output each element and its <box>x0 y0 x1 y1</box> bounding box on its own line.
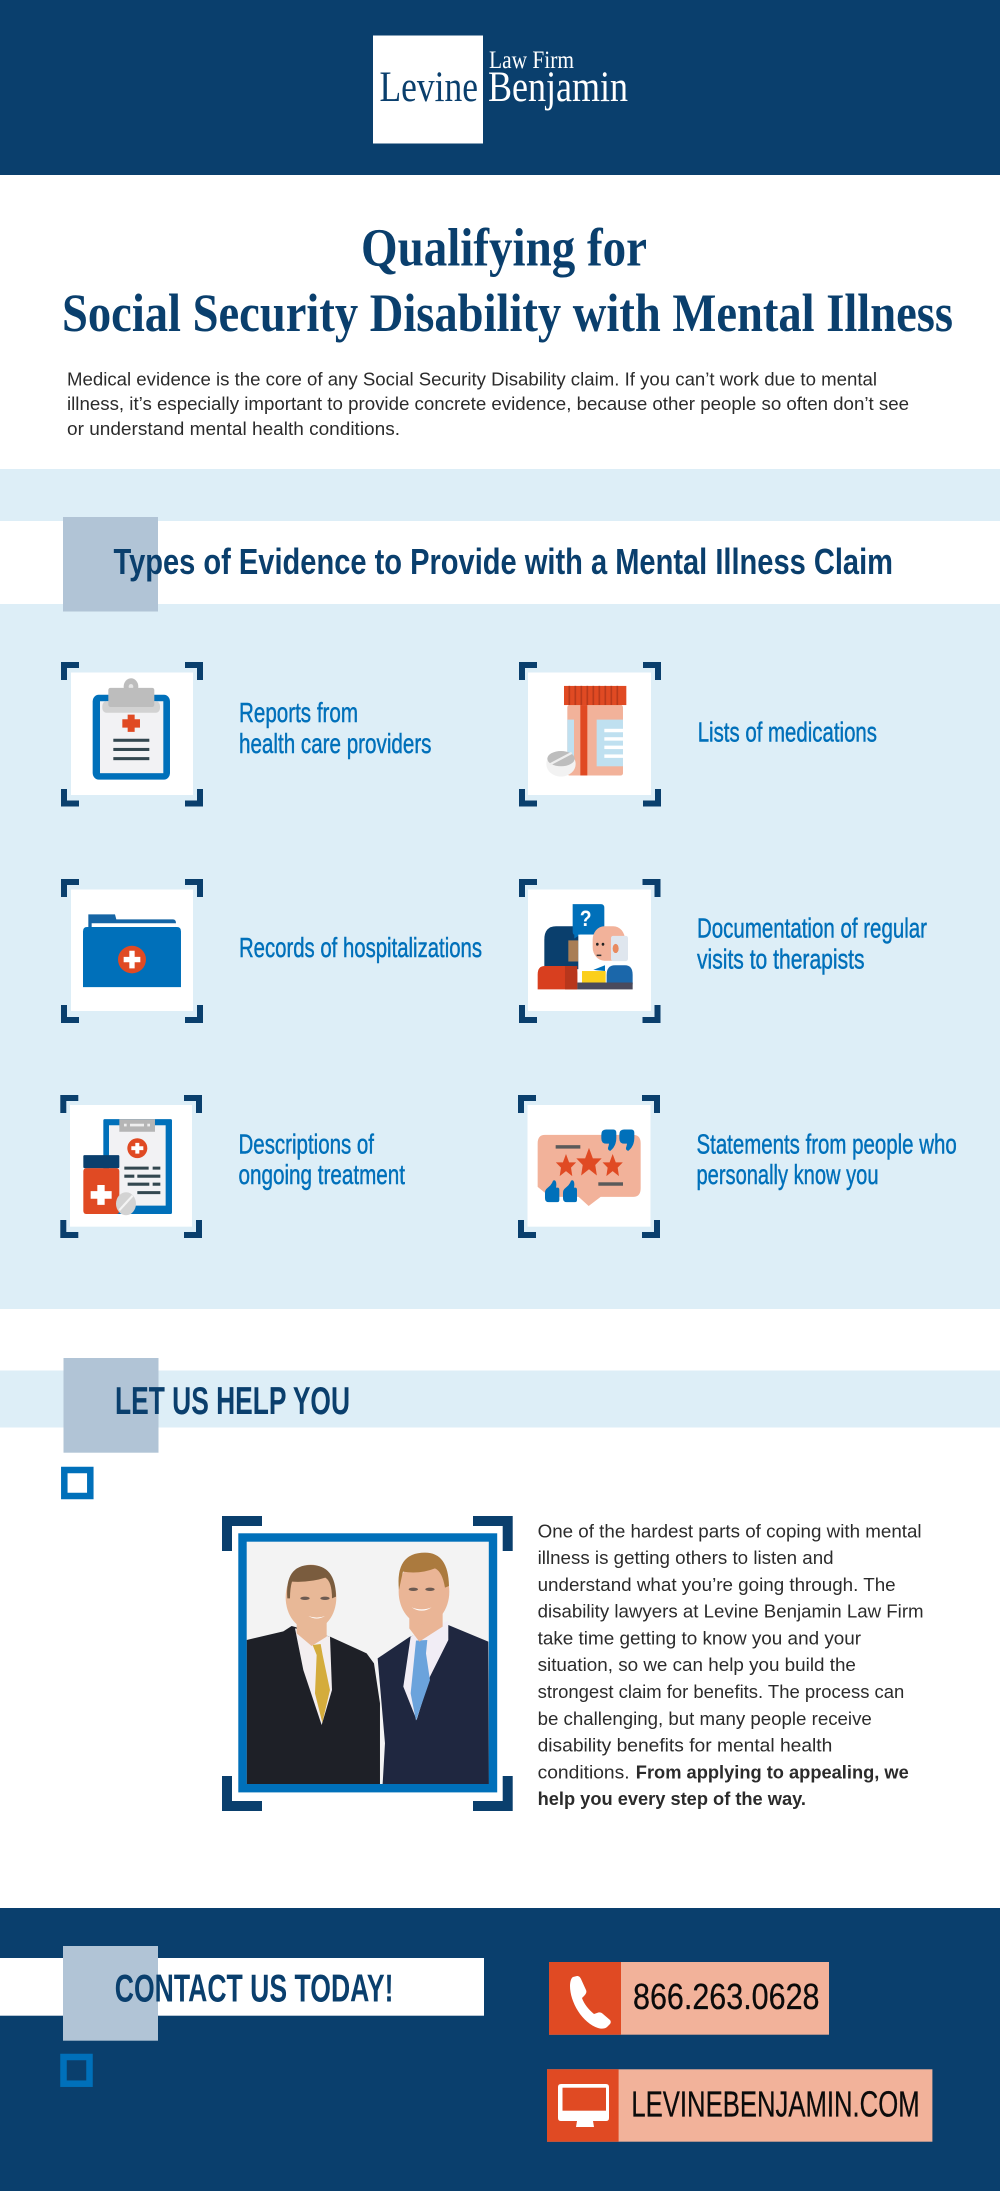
heading: contact us today: CONTACT US TODAY! <box>115 1968 394 2011</box>
icon: medicine bottle <box>546 686 626 777</box>
section: let us help you <box>0 1358 1000 1809</box>
photo of the lawyers <box>227 1521 508 1806</box>
logo: Benjamin <box>488 64 628 111</box>
card: descriptions of ongoing treatment <box>63 1098 405 1235</box>
body text: let us help you: illness is getting others to listen and <box>538 1548 834 1568</box>
logo <box>373 36 628 144</box>
right lawyer <box>378 1553 489 1784</box>
body text: let us help you: be challenging, but many people receive <box>538 1709 872 1729</box>
heading accent square <box>64 1358 158 1453</box>
body text: let us help you: disability lawyers at Levine Benjamin Law Firm <box>538 1602 924 1622</box>
intro text: illness, it’s especially important to provide concrete evidence, because other people so often don’t see <box>67 394 909 414</box>
title: Qualifying for <box>361 218 647 278</box>
card: lists of medications <box>522 665 877 804</box>
body text: let us help you: From applying to appealing, we <box>636 1762 909 1782</box>
phone number: 866.263.0628 <box>633 1976 820 2017</box>
footer: contact us <box>0 1908 1000 2191</box>
header band with logo <box>0 0 1000 175</box>
label <box>239 697 432 759</box>
body text: let us help you <box>538 1521 924 1809</box>
website button <box>547 2069 932 2142</box>
body text: let us help you: take time getting to know you and your <box>538 1628 861 1648</box>
left lawyer <box>247 1565 380 1784</box>
intro text: Medical evidence is the core of any Social Security Disability claim. If you can’t work due to mental <box>67 369 877 389</box>
intro text: or understand mental health conditions. <box>67 419 400 439</box>
body text: let us help you: conditions. <box>538 1762 630 1782</box>
label: health care providers <box>239 728 432 759</box>
body text: let us help you: understand what you’re going through. The <box>538 1575 896 1595</box>
label: Lists of medications <box>698 716 877 747</box>
label <box>697 913 927 974</box>
card: reports from health care providers <box>64 665 432 804</box>
label: Records of hospitalizations <box>239 932 482 963</box>
card: statements from people who know you <box>521 1098 957 1235</box>
heading accent square <box>63 1946 158 2041</box>
icon: therapy session: ? <box>580 907 592 932</box>
body text: let us help you: disability benefits for mental health <box>538 1736 832 1756</box>
label: visits to therapists <box>697 943 864 974</box>
icon: folder <box>83 914 181 987</box>
phone button <box>549 1962 829 2035</box>
card: records of hospitalizations <box>64 882 482 1020</box>
body text: let us help you: One of the hardest parts of coping with mental <box>538 1521 922 1541</box>
label <box>696 1129 957 1190</box>
accent: small square <box>64 2057 90 2084</box>
body text: let us help you: help you every step of the way. <box>538 1789 806 1809</box>
body text: let us help you: situation, so we can help you build the <box>538 1655 856 1675</box>
label: ongoing treatment <box>238 1159 405 1190</box>
label: personally know you <box>696 1159 878 1190</box>
icon: review bubble <box>538 1129 641 1206</box>
icon: phone <box>570 1976 611 2029</box>
heading: let us help you: LET US HELP YOU <box>115 1380 350 1423</box>
panel: types of evidence <box>0 469 1000 1309</box>
logo: Law Firm <box>489 47 574 74</box>
contact banner <box>0 1958 484 2016</box>
label: Reports from <box>239 697 358 728</box>
logo: Levine <box>380 64 478 111</box>
label: Descriptions of <box>238 1129 374 1160</box>
accent: small square <box>64 1470 90 1496</box>
icon: monitor <box>558 2084 609 2127</box>
icon: medical record and bottle <box>83 1119 172 1215</box>
icon: clipboard <box>93 678 170 780</box>
icon: therapy session <box>538 904 633 989</box>
title <box>62 218 953 343</box>
body text: let us help you: strongest claim for benefits. The process can <box>538 1682 904 1702</box>
heading accent square <box>63 517 158 612</box>
label <box>238 1129 405 1190</box>
card: documentation of regular visits <box>522 882 927 1020</box>
intro text <box>67 369 909 439</box>
